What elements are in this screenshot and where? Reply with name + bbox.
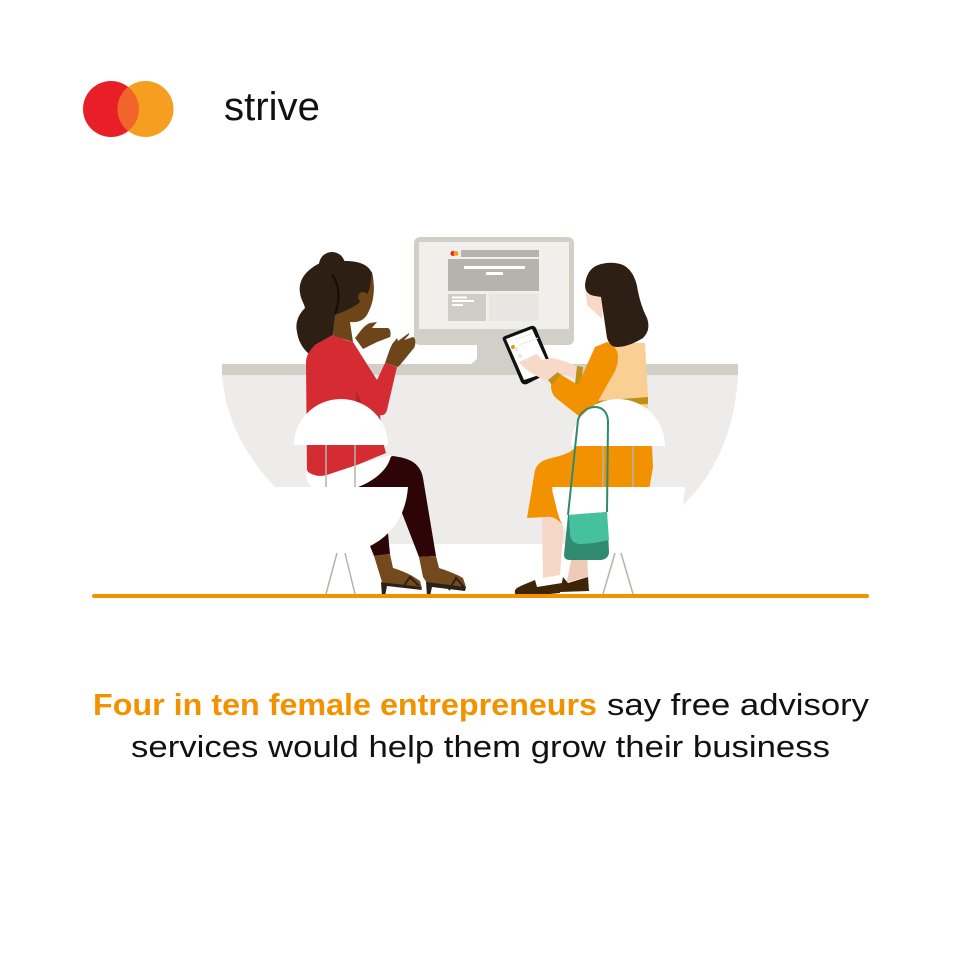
woman left: hands xyxy=(355,322,415,367)
woman right: head xyxy=(585,285,605,319)
monitor xyxy=(414,237,574,364)
woman right: hair xyxy=(585,263,648,347)
woman right: front leg xyxy=(542,515,563,578)
woman left: hair xyxy=(296,252,372,357)
woman right: belt xyxy=(596,397,648,406)
caption line one: say free advisory xyxy=(607,687,870,722)
woman left: back leg xyxy=(370,533,390,556)
woman right: orange sleeve xyxy=(551,342,618,417)
handbag xyxy=(564,407,609,560)
brand name: strive: strive xyxy=(224,85,320,129)
tablet xyxy=(503,326,553,384)
caption highlight: Four in ten female entrepreneurs xyxy=(93,687,597,722)
woman right: back leg xyxy=(567,555,588,582)
desk bowl xyxy=(222,375,738,544)
caption line two: services would help them grow their business xyxy=(131,729,830,764)
white seat back right xyxy=(571,399,665,446)
chair right xyxy=(552,446,685,594)
woman right: front cuff xyxy=(548,372,560,385)
woman left: red sweater xyxy=(306,335,397,476)
woman right: hands xyxy=(519,354,577,381)
woman left: front leg xyxy=(358,456,436,557)
back leg right redraw xyxy=(567,555,588,582)
woman left: neck and head xyxy=(333,272,374,342)
chair left xyxy=(274,445,408,594)
ground line xyxy=(92,594,869,598)
woman right: back sleeve cuff xyxy=(575,366,583,385)
woman right: orange skirt xyxy=(527,446,653,525)
woman right: tan top xyxy=(597,343,648,408)
caption xyxy=(93,687,870,764)
woman left: feet and sandals xyxy=(374,554,466,596)
logo: overlapping circles xyxy=(83,81,174,137)
woman right: shoes xyxy=(515,577,589,596)
white seat back left xyxy=(294,399,388,445)
desk top xyxy=(222,364,738,375)
illustration: two women at a desk xyxy=(222,237,738,596)
white lap shape left xyxy=(306,455,391,487)
